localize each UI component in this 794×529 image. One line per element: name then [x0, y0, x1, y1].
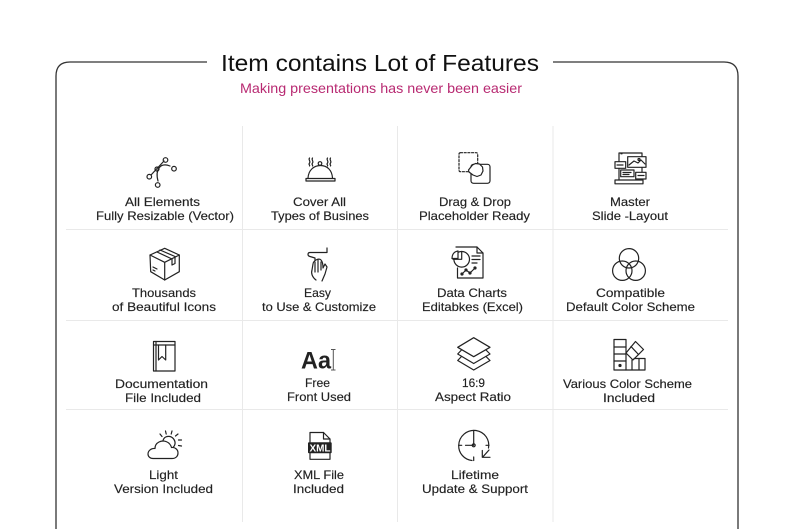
feature: drag and drop	[419, 153, 530, 223]
label: Free	[305, 376, 330, 390]
label	[114, 468, 213, 496]
icon: box	[150, 248, 179, 280]
label: Slide -Layout	[592, 209, 669, 223]
icon: cloud and sun	[148, 431, 182, 458]
label	[287, 376, 351, 404]
label: Easy	[304, 286, 331, 300]
icon: layers	[458, 338, 490, 370]
feature: thousands of icons	[112, 248, 216, 314]
label	[112, 286, 216, 314]
label: Data Charts	[437, 286, 507, 300]
label	[566, 286, 695, 314]
label: Version Included	[114, 482, 213, 496]
feature: master slide	[592, 153, 669, 223]
subtitle: Making presentations has never been easier	[240, 80, 522, 96]
label	[419, 195, 530, 223]
feature: all elements resizable	[96, 158, 234, 223]
icon: color swatches	[614, 340, 645, 370]
icon: cloche	[306, 158, 335, 181]
label	[293, 468, 344, 496]
icon: venn circles	[613, 249, 645, 280]
feature: easy to use	[262, 248, 376, 314]
label: Included	[603, 391, 655, 405]
icon: chart document	[452, 247, 483, 278]
label: XML File	[294, 468, 344, 482]
feature: cover all types	[271, 158, 369, 223]
title: Item contains Lot of Features	[221, 50, 539, 76]
icon: book	[154, 342, 175, 371]
label: Editabkes (Excel)	[422, 300, 523, 314]
feature: data charts	[422, 247, 523, 314]
label: Master	[610, 195, 650, 209]
label: Thousands	[132, 286, 196, 300]
feature: light version	[114, 431, 213, 496]
icon: vector curve	[147, 158, 176, 187]
label: Update & Support	[422, 482, 529, 496]
label: Lifetime	[451, 468, 499, 482]
label: Fully Resizable (Vector)	[96, 209, 234, 223]
feature: xml file	[293, 432, 344, 496]
label: Aspect Ratio	[435, 390, 511, 404]
label	[115, 377, 208, 405]
label	[422, 286, 523, 314]
label	[262, 286, 376, 314]
label: of Beautiful Icons	[112, 300, 216, 314]
label	[592, 195, 669, 223]
icon: drag and drop	[459, 153, 490, 183]
label: Front Used	[287, 390, 351, 404]
label	[96, 195, 234, 223]
label	[563, 377, 692, 405]
icon: xml file: XML	[310, 444, 330, 454]
label: to Use & Customize	[262, 300, 376, 314]
label: Various Color Scheme	[563, 377, 692, 391]
label: Placeholder Ready	[419, 209, 530, 223]
label	[422, 468, 529, 496]
label: Default Color Scheme	[566, 300, 695, 314]
feature: compatible color scheme	[566, 249, 695, 314]
feature: aspect ratio	[435, 338, 511, 404]
feature: various color scheme	[563, 340, 692, 405]
label: Documentation	[115, 377, 208, 391]
label: Drag & Drop	[439, 195, 511, 209]
label: All Elements	[125, 195, 200, 209]
label: Types of Busines	[271, 209, 369, 223]
label: File Included	[125, 391, 201, 405]
label	[271, 195, 369, 223]
label: Compatible	[596, 286, 665, 300]
label: Cover All	[293, 195, 346, 209]
label: 16:9	[462, 376, 485, 390]
icon: clock with arrow	[459, 430, 490, 460]
feature: free font	[287, 348, 351, 404]
label	[435, 376, 511, 404]
rounded frame	[56, 62, 738, 529]
label: Included	[293, 482, 344, 496]
icon: slide layout	[615, 153, 646, 184]
feature: lifetime update	[422, 430, 529, 496]
label: Light	[149, 468, 179, 482]
icon: hand on mouse	[308, 248, 327, 281]
icon: type sample: Aa	[301, 348, 332, 374]
feature: documentation	[115, 342, 208, 405]
